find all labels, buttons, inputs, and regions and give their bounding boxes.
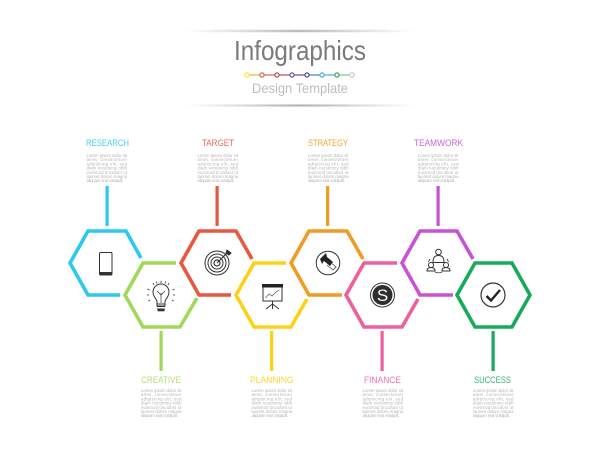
body: target: aliquam erat volutpat. bbox=[198, 178, 234, 183]
body: creative bbox=[141, 388, 182, 418]
hexagon: creative bbox=[125, 263, 197, 327]
hexagon: finance bbox=[346, 263, 418, 327]
body: strategy bbox=[308, 153, 349, 183]
body: planning: laoreet dolore magna bbox=[252, 409, 293, 414]
body: planning: Lorem ipsum dolor sit bbox=[252, 388, 293, 393]
body: strategy: amet, consectetuer bbox=[308, 157, 349, 162]
body: planning: adipiscing elit, sed bbox=[252, 396, 293, 401]
title: Infographics bbox=[234, 35, 366, 66]
body: strategy: euismod tincidunt ut bbox=[308, 170, 349, 175]
body: planning: amet, consectetuer bbox=[252, 392, 293, 397]
heading: success: SUCCESS bbox=[474, 375, 511, 386]
connector: planning bbox=[270, 331, 273, 371]
body: finance: diam nonummy nibh bbox=[362, 401, 404, 406]
icon: arrow badge bbox=[316, 251, 340, 275]
body: teamwork: laoreet dolore magna bbox=[418, 174, 459, 179]
body: success: euismod tincidunt ut bbox=[473, 405, 514, 410]
text block: strategy bbox=[308, 138, 349, 183]
connector: research bbox=[106, 186, 109, 226]
body: strategy: Lorem ipsum dolor sit bbox=[308, 153, 349, 158]
heading: planning: PLANNING bbox=[250, 375, 294, 386]
hexagon: planning bbox=[236, 263, 307, 327]
connector: success bbox=[492, 331, 495, 371]
body: success: adipiscing elit, sed bbox=[473, 396, 514, 401]
body: creative: aliquam erat volutpat. bbox=[141, 413, 178, 418]
body: target: amet, consectetuer bbox=[198, 157, 239, 162]
body: planning: euismod tincidunt ut bbox=[252, 405, 293, 410]
heading: research: RESEARCH bbox=[86, 138, 129, 149]
subtitle: Design Template bbox=[252, 80, 348, 96]
body: finance: aliquam erat volutpat. bbox=[362, 413, 400, 418]
body: research: Lorem ipsum dolor sit bbox=[86, 153, 128, 158]
icon: light bulb bbox=[147, 281, 175, 311]
connector: target bbox=[216, 186, 219, 226]
body: creative: Lorem ipsum dolor sit bbox=[141, 388, 182, 393]
icon: team circle bbox=[427, 249, 450, 273]
body: planning: aliquam erat volutpat. bbox=[252, 413, 288, 418]
text block: finance bbox=[362, 375, 404, 418]
timeline decoration bbox=[245, 73, 354, 77]
body: finance: adipiscing elit, sed bbox=[362, 396, 404, 401]
hexagon: success bbox=[457, 263, 530, 327]
body: research: aliquam erat volutpat. bbox=[86, 178, 124, 183]
connector: teamwork bbox=[436, 186, 440, 226]
body: research: adipiscing elit, sed bbox=[86, 161, 128, 166]
body: planning: diam nonummy nibh bbox=[252, 401, 293, 406]
body: target: euismod tincidunt ut bbox=[198, 170, 239, 175]
body: creative: euismod tincidunt ut bbox=[141, 405, 182, 410]
text block: creative bbox=[141, 375, 182, 418]
body: teamwork bbox=[418, 153, 459, 183]
icon: dollar coin bbox=[370, 283, 394, 307]
heading: creative: CREATIVE bbox=[141, 375, 181, 386]
body: finance bbox=[362, 388, 404, 418]
hexagon: teamwork bbox=[402, 231, 473, 295]
body: success: amet, consectetuer bbox=[473, 392, 514, 397]
body: teamwork: adipiscing elit, sed bbox=[418, 161, 459, 166]
body: strategy: adipiscing elit, sed bbox=[308, 161, 349, 166]
text block: teamwork bbox=[414, 138, 464, 183]
text block: planning bbox=[250, 375, 294, 418]
body: success: aliquam erat volutpat. bbox=[473, 413, 510, 418]
heading: finance: FINANCE bbox=[364, 375, 401, 386]
body: teamwork: amet, consectetuer bbox=[418, 157, 459, 162]
icon: target bbox=[205, 250, 231, 275]
icon: smartphone bbox=[100, 252, 112, 275]
body: target: laoreet dolore magna bbox=[198, 174, 239, 179]
body: teamwork: aliquam erat volutpat. bbox=[418, 178, 455, 183]
hexagon: research bbox=[70, 231, 141, 295]
connector: strategy bbox=[326, 186, 329, 226]
body: research: euismod tincidunt ut bbox=[86, 170, 128, 175]
header top rule bbox=[186, 30, 414, 32]
body: target: Lorem ipsum dolor sit bbox=[198, 153, 239, 158]
icon: dollar coin: S bbox=[377, 286, 388, 305]
body: strategy: aliquam erat volutpat. bbox=[308, 178, 345, 183]
body: success: laoreet dolore magna bbox=[473, 409, 514, 414]
connector: creative bbox=[160, 331, 163, 371]
body: creative: laoreet dolore magna bbox=[141, 409, 182, 414]
body: research: laoreet dolore magna bbox=[86, 174, 128, 179]
heading: teamwork: TEAMWORK bbox=[414, 138, 464, 149]
icon: presentation board bbox=[262, 284, 283, 309]
body: finance: euismod tincidunt ut bbox=[362, 405, 404, 410]
body: research: amet, consectetuer bbox=[86, 157, 128, 162]
header bbox=[186, 30, 414, 106]
body: creative: diam nonummy nibh bbox=[141, 401, 182, 406]
body: success: diam nonummy nibh bbox=[473, 401, 514, 406]
body: teamwork: diam nonummy nibh bbox=[418, 166, 459, 171]
body: teamwork: euismod tincidunt ut bbox=[418, 170, 459, 175]
body: creative: amet, consectetuer bbox=[141, 392, 182, 397]
body: teamwork: Lorem ipsum dolor sit bbox=[418, 153, 459, 158]
heading: target: TARGET bbox=[202, 138, 234, 149]
text block: research bbox=[86, 138, 129, 183]
body: finance: amet, consectetuer bbox=[362, 392, 404, 397]
header bottom rule bbox=[186, 104, 414, 106]
heading: strategy: STRATEGY bbox=[308, 138, 349, 149]
text block: success bbox=[473, 375, 514, 418]
text block: target bbox=[198, 138, 239, 183]
body: strategy: laoreet dolore magna bbox=[308, 174, 349, 179]
body: finance: laoreet dolore magna bbox=[362, 409, 404, 414]
connector: finance bbox=[380, 331, 384, 371]
body: finance: Lorem ipsum dolor sit bbox=[362, 388, 404, 393]
hexagon: strategy bbox=[291, 231, 363, 295]
body: target bbox=[198, 153, 239, 183]
icon: check mark bbox=[481, 283, 505, 307]
body: research bbox=[86, 153, 128, 183]
body: strategy: diam nonummy nibh bbox=[308, 166, 349, 171]
body: research: diam nonummy nibh bbox=[86, 166, 128, 171]
hexagon: target bbox=[181, 231, 252, 295]
body: success bbox=[473, 388, 514, 418]
body: creative: adipiscing elit, sed bbox=[141, 396, 182, 401]
body: success: Lorem ipsum dolor sit bbox=[473, 388, 514, 393]
body: planning bbox=[252, 388, 293, 418]
body: target: adipiscing elit, sed bbox=[198, 161, 239, 166]
body: target: diam nonummy nibh bbox=[198, 166, 239, 171]
